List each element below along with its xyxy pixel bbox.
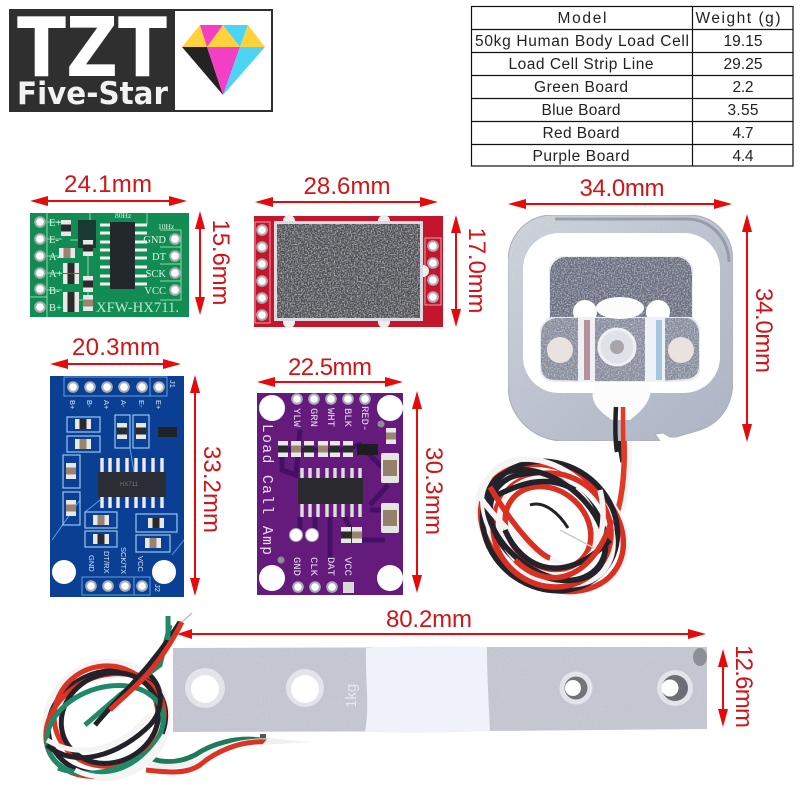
strip wire coil [28,613,268,796]
purple board labels: VCC [341,557,353,576]
icon: diamond [182,25,265,95]
table row: purple board [532,148,754,165]
blue board labels: VCC [136,556,145,572]
green board labels: DT [152,252,167,263]
HX711 chip [100,222,147,289]
load cell wire coil [453,405,651,618]
table row: green board: 2.2 [732,79,754,96]
green board labels: E- [49,235,59,246]
dimension: red width: 28.6mm [304,173,390,200]
strip hole 3 [560,672,592,704]
purple board labels: DAT [324,557,336,576]
dimension: green width [30,171,187,206]
dimension: red width [255,173,438,207]
table row: green board: Green Board [534,79,628,96]
strip hole 1 [185,668,225,708]
dimension: strip width: 80.2mm [386,606,472,633]
strip hole 2 [286,669,324,707]
table row: blue board [542,102,758,119]
purple board chip [298,468,363,517]
dimension: blue height [190,375,225,596]
table row: blue board: Blue Board [542,102,620,119]
blue board labels: GND [87,555,96,572]
strip marking: 1kg [343,684,360,708]
purple board labels: GND [290,557,302,576]
table row: strip line [508,56,762,73]
blue board labels: B+ [68,400,77,410]
blue board labels: E- [137,400,146,408]
dimension: purple height: 30.3mm [420,447,447,535]
strip wires to bar [262,738,310,745]
table header [558,10,780,27]
dimension: load cell width: 34.0mm [580,175,664,202]
table row: blue board: 3.55 [728,102,758,119]
green board labels: B- [49,286,60,297]
table row: human body load cell: 19.15 [724,33,762,50]
strip metal bar [173,647,707,732]
logo wordmark TZT: TZT [17,1,167,96]
strip hole 4 [657,670,693,706]
panel: green HX711 board [30,211,189,317]
dimension: load cell height: 34.0mm [750,288,777,373]
dimension: red height: 17.0mm [463,228,490,314]
dimension: load cell height [742,214,777,442]
purple board labels [258,406,370,577]
table row: red board [542,125,754,142]
blue board labels: J1 [168,380,177,388]
dimension: strip width [177,606,706,639]
purple board labels: RED- [358,406,370,431]
green board labels: A- [49,252,61,263]
dimension: load cell width [508,175,732,209]
blue board labels [68,380,177,592]
table row: purple board: Purple Board [532,148,630,165]
blue board labels: DT/RX [102,551,111,574]
dimension: purple height [412,391,447,593]
load cell inner gap [523,233,720,393]
blue board chip: HX711 [120,482,139,488]
green board labels: GND [143,235,166,246]
dimension: blue height: 33.2mm [198,446,225,533]
panel: red board [254,215,443,328]
table header: Weight (g) [696,10,780,27]
blue board labels: J2 [153,584,162,592]
blue board labels: B- [85,400,94,408]
load cell outer frame [508,215,733,441]
blue board labels: SCK/TX [119,547,128,574]
dimension: red height [451,215,490,327]
table: model weights [472,6,793,166]
dimension: green height: 15.6mm [207,220,234,306]
metal shield [274,221,423,321]
table row: human body load cell: 50kg Human Body Load Cell [475,33,689,50]
load cell glue [593,297,651,420]
table row: red board: Red Board [542,125,620,142]
load cell bracket [540,317,700,382]
purple board labels: BLK [341,408,353,428]
table row: strip line: Load Cell Strip Line [508,56,654,73]
table header: Model [558,10,606,27]
purple board labels: WHT [324,408,336,427]
purple board labels: GRN [307,408,319,427]
panel: blue board [50,376,184,597]
strip white glue [365,646,490,733]
green board labels: E+ [49,218,61,229]
purple board labels: Load Call Amp [258,424,274,555]
green board labels: VCC [144,286,166,297]
green board labels: A+ [49,269,63,280]
green board labels [49,211,179,316]
green board labels: XFW-HX711. [96,300,179,316]
purple board labels: YLW [290,408,302,428]
green board labels: B+ [49,303,62,314]
logo wordmark Five-Star: Five-Star [17,76,169,112]
table row: purple board: 4.4 [732,148,754,165]
dimension: green width: 24.1mm [64,171,152,198]
purple board labels: CLK [307,557,319,577]
table row: red board: 4.7 [732,125,754,142]
blue board labels: E+ [154,400,163,410]
dimension: strip height [718,645,757,728]
panel: round load cell [453,215,733,618]
logo: TZT Five-Star [9,1,273,112]
blue board labels: A+ [102,400,111,410]
blue board chip [98,458,166,508]
panel: purple board [257,393,403,595]
green board labels: SCK [146,269,166,280]
dimension: blue width [50,334,181,369]
green board labels: 80Hz [115,211,132,220]
dimension: green height [195,211,234,315]
panel: strip load cell [28,613,707,796]
table row: green board [534,79,754,96]
dimension: strip height: 12.6mm [730,645,757,728]
table row: strip line: 29.25 [724,56,762,73]
dimension: blue width: 20.3mm [72,334,160,361]
green board labels: 10Hz [158,222,175,231]
load cell plate [549,256,693,325]
blue board labels: A- [119,400,128,408]
dimension: purple width [257,354,403,387]
dimension: purple width: 22.5mm [288,354,372,381]
